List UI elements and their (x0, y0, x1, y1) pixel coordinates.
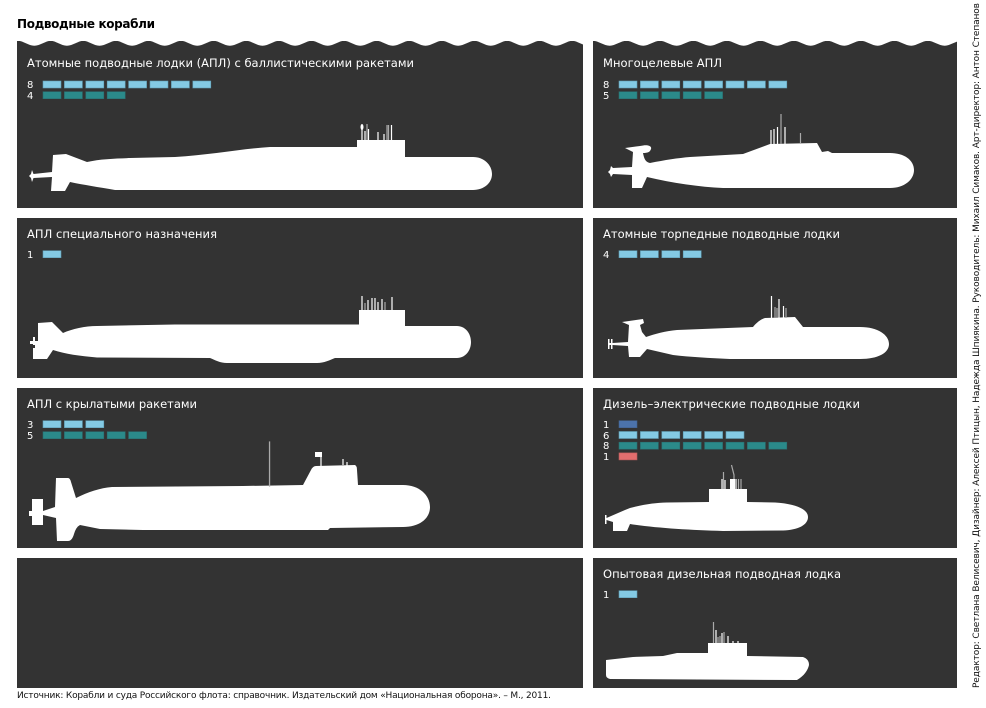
legend row: 8 light blue: 8 (603, 80, 609, 91)
source note: Источник: Корабли и суда Российского флота: справочник. Издательский дом «Национальная оборона». – М., 2011. (17, 691, 551, 701)
title: Подводные корабли (17, 17, 155, 31)
legend row: 8 light blue (27, 80, 211, 91)
heading: special purpose: АПЛ специального назначения (27, 227, 217, 241)
legend row: 3 light blue (27, 420, 104, 431)
legend row: 1 blue (603, 420, 637, 431)
legend row: 5 teal (603, 91, 723, 102)
legend row: 1 light blue: 1 (603, 590, 609, 601)
legend row: 4 light blue: 4 (603, 250, 609, 261)
panel: torpedo submarines (593, 218, 957, 378)
panel: special purpose submarines (17, 218, 583, 378)
legend row: 1 red (603, 452, 637, 463)
legend row: 5 teal: 5 (27, 431, 33, 442)
legend row: 5 teal: 5 (603, 91, 609, 102)
panel: diesel-electric submarines (593, 388, 957, 548)
legend row: 1 light blue (27, 250, 61, 261)
legend row: 8 teal: 8 (603, 441, 609, 452)
heading: multipurpose: Многоцелевые АПЛ (603, 56, 722, 70)
heading: diesel-electric: Дизель–электрические подводные лодки (603, 397, 860, 411)
panel: empty bottom left (17, 558, 583, 688)
submarine silhouette: ballistic (29, 124, 492, 191)
submarine silhouette: experimental (606, 622, 809, 680)
credits: Редактор: Светлана Велисевич, Дизайнер: Алексей Птицын, Надежда Шпиякина. Руководитель: Михаил Симаков. Арт-директор: Антон Степанов (972, 3, 982, 688)
panel: cruise missile submarines (17, 388, 583, 548)
heading: torpedo: Атомные торпедные подводные лодки (603, 227, 840, 241)
legend row: 6 light blue (603, 431, 744, 442)
panel: experimental diesel submarine (593, 558, 957, 688)
panel: multipurpose submarines (593, 38, 957, 208)
heading: cruise missile: АПЛ с крылатыми ракетами (27, 397, 197, 411)
submarine silhouette: diesel-electric (605, 465, 808, 531)
legend row: 8 teal (603, 441, 787, 452)
legend row: 1 light blue: 1 (27, 250, 33, 261)
legend row: 1 blue: 1 (603, 420, 609, 431)
legend row: 4 teal: 4 (27, 91, 33, 102)
legend row: 3 light blue: 3 (27, 420, 33, 431)
legend row: 4 teal (27, 91, 125, 102)
legend row: 4 light blue (603, 250, 701, 261)
legend row: 1 light blue (603, 590, 637, 601)
legend row: 5 teal (27, 431, 147, 442)
heading: experimental: Опытовая дизельная подводная лодка (603, 567, 841, 581)
submarine silhouette: multipurpose (608, 114, 914, 188)
legend row: 1 red: 1 (603, 452, 609, 463)
submarine silhouette: special purpose (30, 296, 471, 363)
panel: ballistic missile submarines (17, 38, 583, 208)
legend row: 6 light blue: 6 (603, 431, 609, 442)
legend row: 8 light blue: 8 (27, 80, 33, 91)
submarine silhouette: torpedo (608, 296, 889, 359)
submarine silhouette: cruise missile (29, 442, 430, 541)
legend row: 8 light blue (603, 80, 787, 91)
heading: ballistic: Атомные подводные лодки (АПЛ) с баллистическими ракетами (27, 56, 414, 70)
